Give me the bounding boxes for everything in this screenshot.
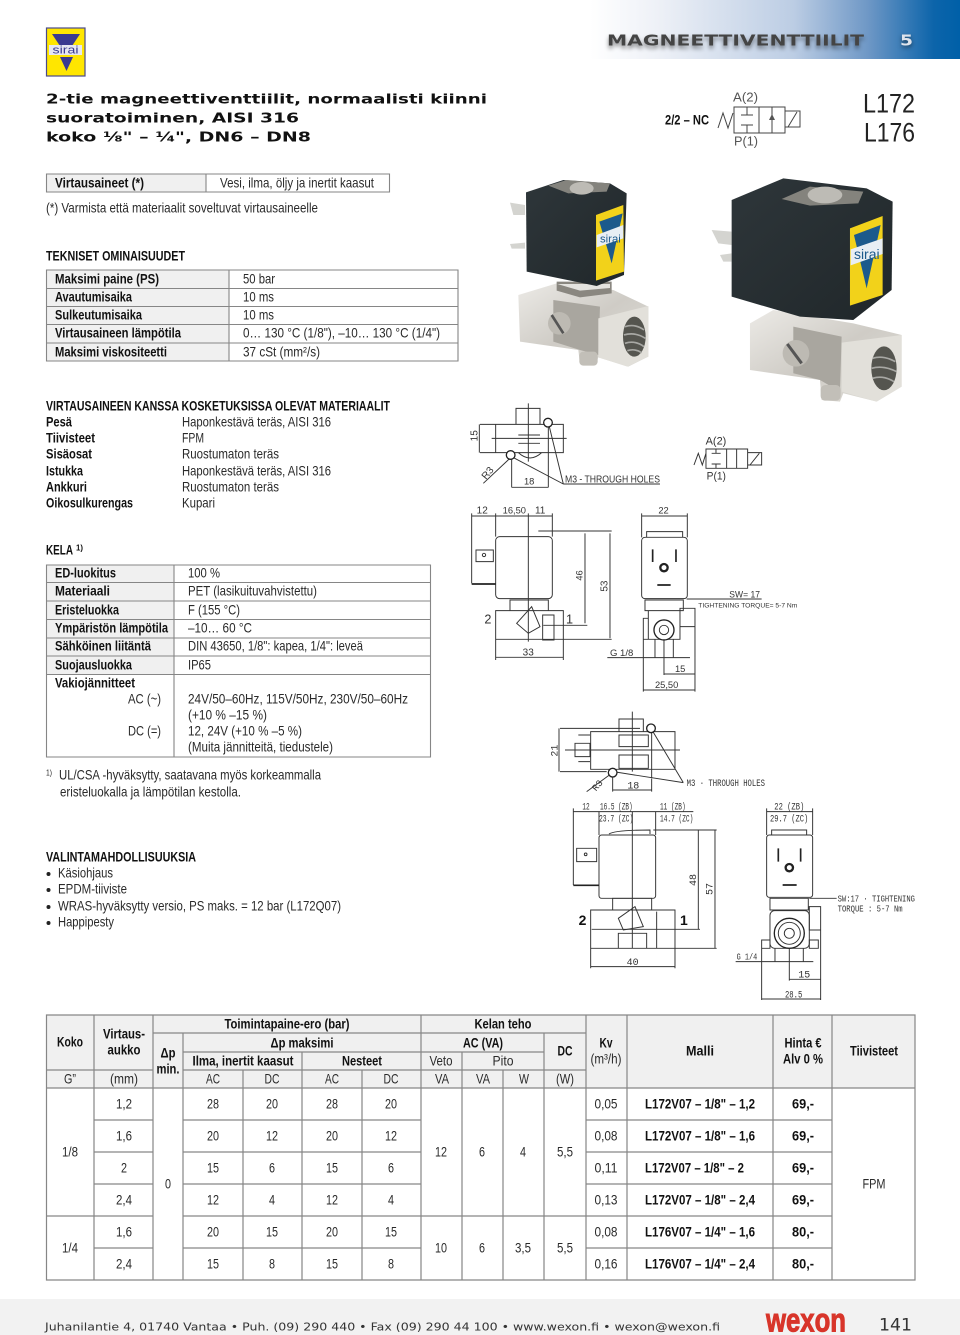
title: koko ¹⁄₈" – ¹⁄₄", DN6 – DN8	[46, 129, 311, 145]
title: suoratoiminen, AISI 316	[46, 110, 299, 126]
table header: Pito	[492, 1053, 514, 1068]
table header: Δp	[160, 1045, 176, 1060]
valve symbol 2/2-NC: A(2)	[733, 89, 758, 104]
side view: 16,50	[503, 505, 526, 515]
table body: 69,-	[792, 1096, 814, 1111]
table: coil: 12, 24V (+10 % –5 %)	[188, 723, 302, 738]
table body: 6	[479, 1144, 485, 1159]
side view: 14.7 (ZC)	[660, 813, 693, 824]
table body: 69,-	[792, 1192, 814, 1207]
table: coil: (Muita jännitteitä, tiedustele)	[188, 739, 333, 754]
table: coil: Vakiojännitteet	[55, 675, 135, 690]
table header: W	[519, 1071, 529, 1086]
list: wetted materials: Haponkestävä teräs, AISI 316	[182, 463, 331, 478]
table body: 15	[326, 1160, 338, 1175]
table: coil: –10… 60 °C	[188, 620, 252, 635]
valve symbol: P(1)	[707, 470, 726, 482]
icon: sirai logo	[46, 28, 85, 76]
table: technical properties: Avautumisaika	[55, 289, 132, 304]
table: coil: Suojausluokka	[55, 657, 132, 672]
front view: TORQUE : 5-7 Nm	[838, 903, 903, 914]
product photo: two solenoid valves	[510, 178, 902, 402]
side view: 11 (ZB)	[660, 802, 686, 813]
side view: 16.5 (ZB)	[600, 802, 633, 813]
front view: 15	[675, 664, 685, 674]
table header: Toimintapaine-ero (bar)	[224, 1016, 350, 1031]
table body: 12	[385, 1128, 397, 1143]
table: technical properties: Maksimi viskositeetti	[55, 344, 167, 359]
top view: R3	[480, 465, 497, 482]
table header: Hinta €	[784, 1035, 822, 1050]
front view: G 1/8	[610, 648, 633, 658]
heading: coil: KELA	[46, 542, 73, 557]
table: technical properties: 37 cSt (mm²/s)	[243, 344, 320, 359]
table: technical properties: Sulkeutumisaika	[55, 307, 142, 322]
table header: (m³/h)	[590, 1051, 622, 1066]
valve symbol 2/2-NC	[665, 89, 800, 148]
side view: 46	[575, 570, 585, 581]
side view	[573, 802, 717, 968]
heading: options: VALINTAMAHDOLLISUUKSIA	[46, 849, 196, 864]
side view: 40	[627, 957, 639, 968]
side view: 23.7 (ZC)	[599, 813, 633, 824]
list: wetted materials: Ruostumaton teräs	[182, 446, 279, 461]
valve symbol: A(2)	[706, 435, 726, 447]
table header: (W)	[556, 1071, 574, 1086]
table body: 69,-	[792, 1160, 814, 1175]
table body: 12	[326, 1192, 338, 1207]
front view: SW= 17	[729, 589, 760, 599]
table body: 15	[326, 1256, 338, 1271]
table header: Alv 0 %	[783, 1051, 823, 1066]
table body: 0,08	[594, 1128, 618, 1143]
footnote: UL/CSA -hyväksytty, saatavana myös korkeammalla	[59, 767, 321, 782]
table body: 4	[520, 1144, 526, 1159]
table body: 20	[207, 1128, 219, 1143]
side view: 33	[523, 647, 534, 658]
table: coil: Ympäristön lämpötila	[55, 620, 168, 635]
footnote	[46, 767, 321, 799]
table body: 8	[388, 1256, 394, 1271]
side view: 12	[582, 802, 590, 813]
front view	[607, 505, 798, 692]
header band: MAGNEETTIVENTTIILIT	[607, 31, 865, 49]
table body: 20	[326, 1128, 338, 1143]
front view: 28.5	[785, 989, 802, 1000]
top view: 15	[469, 430, 480, 441]
table body: 12	[266, 1128, 278, 1143]
technical drawing: L176	[549, 712, 915, 1000]
table header: aukko	[108, 1042, 140, 1057]
footnote: eristeluokalla ja lämpötilan kestolla.	[60, 784, 241, 799]
table body: 6	[269, 1160, 275, 1175]
list: options	[46, 865, 341, 929]
model codes: L176	[864, 117, 915, 147]
table header: AC	[325, 1071, 339, 1086]
table: technical properties: Maksimi paine (PS)	[55, 271, 159, 286]
table header: G”	[64, 1071, 76, 1086]
table body: L176V07 – 1/4" – 1,6	[645, 1224, 755, 1239]
table body: 15	[207, 1160, 219, 1175]
table body: 2	[121, 1160, 127, 1175]
note on fluids: (*) Varmista että materiaalit soveltuvat virtausaineelle	[46, 200, 318, 215]
table body: L176V07 – 1/4" – 2,4	[645, 1256, 755, 1271]
table: technical properties: Virtausaineen lämpötila	[55, 325, 181, 340]
list: wetted materials: Istukka	[46, 463, 83, 478]
table body: L172V07 – 1/8" – 1,6	[645, 1128, 755, 1143]
small valve: sirai	[600, 233, 621, 245]
table body: 80,-	[792, 1256, 814, 1271]
table body: 69,-	[792, 1128, 814, 1143]
table: technical properties: 10 ms	[243, 307, 274, 322]
model codes: L172	[863, 88, 915, 118]
top view: M3 · THROUGH HOLES	[687, 778, 765, 789]
table body: 10	[435, 1240, 447, 1255]
table body: 0,08	[594, 1224, 618, 1239]
table header: DC	[264, 1071, 280, 1086]
table: coil: (+10 % –15 %)	[188, 707, 267, 722]
side view	[472, 505, 612, 660]
valve symbol	[694, 435, 762, 482]
table body: 2,4	[116, 1192, 132, 1207]
table: coil: 100 %	[188, 565, 220, 580]
table body: 6	[479, 1240, 485, 1255]
table body: 8	[269, 1256, 275, 1271]
table body: 5,5	[557, 1144, 573, 1159]
table: coil: 24V/50–60Hz, 115V/50Hz, 230V/50–60Hz	[188, 691, 408, 706]
table: coil: Eristeluokka	[55, 602, 119, 617]
table body: 20	[326, 1224, 338, 1239]
table header: Veto	[430, 1053, 452, 1068]
list: wetted materials: Sisäosat	[46, 446, 92, 461]
front view: 22 (ZB)	[774, 802, 804, 813]
large valve: sirai	[854, 246, 880, 262]
front view: G 1/4	[737, 951, 758, 962]
list: options: EPDM-tiiviste	[58, 881, 127, 896]
list: wetted materials: Ankkuri	[46, 479, 87, 494]
table body: 28	[326, 1096, 338, 1111]
list: wetted materials	[46, 414, 331, 510]
list: wetted materials: Pesä	[46, 414, 72, 429]
side view: 1	[680, 912, 688, 928]
footer band	[0, 1299, 960, 1335]
table body: L172V07 – 1/8" – 2,4	[645, 1192, 755, 1207]
table body: 0,05	[594, 1096, 618, 1111]
table header: Malli	[686, 1043, 714, 1058]
table header: AC (VA)	[463, 1035, 503, 1050]
table body: 15	[207, 1256, 219, 1271]
side view: 53	[599, 580, 610, 592]
side view: 48	[688, 874, 699, 886]
table: coil: DC (=)	[128, 723, 161, 738]
front view	[736, 802, 915, 1000]
table header: Δp maksimi	[270, 1035, 334, 1050]
top view	[549, 712, 765, 794]
title: 2-tie magneettiventtiilit, normaalisti kiinni	[46, 91, 487, 107]
model codes	[863, 88, 915, 147]
table: coil: IP65	[188, 657, 211, 672]
table: technical properties: 10 ms	[243, 289, 274, 304]
table header: min.	[156, 1061, 180, 1076]
heading: technical properties: TEKNISET OMINAISUUDET	[46, 248, 186, 263]
table: fluids	[46, 174, 390, 192]
heading: wetted materials: VIRTAUSAINEEN KANSSA KOSKETUKSISSA OLEVAT MATERIAALIT	[46, 398, 391, 413]
table body: 28	[207, 1096, 219, 1111]
table body	[62, 1096, 886, 1271]
table header: Ilma, inertit kaasut	[192, 1053, 294, 1068]
top view: 21	[549, 745, 560, 757]
side view: 11	[535, 505, 546, 516]
table body: 5,5	[557, 1240, 573, 1255]
table header: AC	[206, 1071, 220, 1086]
list: wetted materials: Tiivisteet	[46, 430, 95, 445]
top view: 18	[524, 477, 534, 487]
front view: 29.7 (ZC)	[770, 813, 808, 824]
title	[46, 91, 487, 145]
small valve	[510, 180, 648, 367]
table body: 12	[207, 1192, 219, 1207]
table: technical properties: 0… 130 °C (1/8"), –10… 130 °C (1/4")	[243, 325, 440, 340]
table body: 2,4	[116, 1256, 132, 1271]
list: wetted materials: Kupari	[182, 495, 215, 510]
top view: R3	[590, 778, 605, 794]
table body: 4	[388, 1192, 394, 1207]
list: options: Happipesty	[58, 914, 114, 929]
list: options: WRAS-hyväksytty versio, PS maks. = 12 bar (L172Q07)	[58, 898, 341, 913]
header band	[590, 0, 960, 59]
icon: sirai logo: sirai	[52, 44, 78, 56]
valve symbol 2/2-NC: 2/2 – NC	[665, 112, 709, 127]
table: fluids: Vesi, ilma, öljy ja inertit kaasut	[220, 175, 374, 190]
table body: 4	[269, 1192, 275, 1207]
table body: 20	[266, 1096, 278, 1111]
footer band: Juhanilantie 4, 01740 Vantaa • Puh. (09) 290 440 • Fax (09) 290 44 100 • www.wexon.fi • wexon@wexon.fi	[44, 1321, 720, 1333]
large valve	[712, 178, 902, 402]
table header: (mm)	[110, 1071, 138, 1086]
list: options: Käsiohjaus	[58, 865, 113, 880]
table: technical properties: 50 bar	[243, 271, 275, 286]
table body: 0,13	[594, 1192, 618, 1207]
top view: 18	[627, 781, 639, 792]
table header	[57, 1016, 898, 1086]
table header: Kelan teho	[474, 1016, 532, 1031]
table: models and specifications	[46, 1015, 915, 1280]
header band: 5	[900, 31, 913, 49]
front view: 15	[798, 969, 810, 980]
table body: 20	[385, 1096, 397, 1111]
table header: Koko	[57, 1034, 83, 1049]
side view: 2	[484, 612, 491, 626]
table body: L172V07 – 1/8" – 1,2	[645, 1096, 755, 1111]
table body: 80,-	[792, 1224, 814, 1239]
front view: 22	[658, 505, 669, 515]
table: coil: Materiaali	[55, 583, 110, 598]
side view: 2	[579, 912, 587, 928]
list: wetted materials: Haponkestävä teräs, AISI 316	[182, 414, 331, 429]
side view: 1	[566, 612, 573, 626]
table header: Virtaus-	[103, 1026, 145, 1041]
table header: VA	[476, 1071, 491, 1086]
footer band: 141	[879, 1315, 912, 1335]
front view: SW:17 · TIGHTENING	[838, 894, 915, 905]
table body: L172V07 – 1/8" – 2	[645, 1160, 744, 1175]
table body: 15	[266, 1224, 278, 1239]
front view: TIGHTENING TORQUE= 5-7 Nm	[698, 602, 798, 609]
table body: 6	[388, 1160, 394, 1175]
table: technical properties	[46, 270, 458, 361]
valve symbol 2/2-NC: P(1)	[734, 133, 758, 148]
footnote: 1)	[46, 768, 52, 777]
table body: 0,16	[594, 1256, 618, 1271]
table body: 1/8	[62, 1144, 78, 1159]
table body: FPM	[862, 1176, 886, 1191]
table header: Tiivisteet	[850, 1043, 898, 1058]
table: coil: PET (lasikuituvahvistettu)	[188, 583, 317, 598]
table body: 1,2	[116, 1096, 132, 1111]
table body: 1,6	[116, 1224, 132, 1239]
technical drawing: L172	[469, 403, 798, 692]
table: coil: F (155 °C)	[188, 602, 240, 617]
side view: 12	[477, 505, 488, 516]
table header: Nesteet	[342, 1053, 382, 1068]
table body: 15	[385, 1224, 397, 1239]
table body: 0,11	[594, 1160, 618, 1175]
table: coil	[46, 565, 430, 757]
table body: 1,6	[116, 1128, 132, 1143]
table: coil: Sähköinen liitäntä	[55, 638, 151, 653]
table header: DC	[384, 1071, 399, 1086]
table: coil: DIN 43650, 1/8": kapea, 1/4": leveä	[188, 638, 363, 653]
table body: 12	[435, 1144, 447, 1159]
heading: coil: 1)	[76, 543, 83, 552]
side view: 57	[705, 883, 716, 895]
table body: 0	[165, 1176, 171, 1191]
top view: M3 - THROUGH HOLES	[565, 475, 660, 486]
list: wetted materials: Ruostumaton teräs	[182, 479, 279, 494]
table header: VA	[435, 1071, 450, 1086]
table header: Kv	[600, 1035, 613, 1050]
table: fluids: Virtausaineet (*)	[55, 175, 144, 190]
table body: 1/4	[62, 1240, 78, 1255]
top view	[469, 403, 660, 487]
list: wetted materials: FPM	[182, 430, 204, 445]
table body: 20	[207, 1224, 219, 1239]
table body: 3,5	[515, 1240, 531, 1255]
front view: 25,50	[655, 680, 678, 690]
table: coil: AC (~)	[128, 691, 161, 706]
table: coil: ED-luokitus	[55, 565, 116, 580]
list: wetted materials: Oikosulkurengas	[46, 495, 133, 510]
table header: DC	[558, 1043, 573, 1058]
